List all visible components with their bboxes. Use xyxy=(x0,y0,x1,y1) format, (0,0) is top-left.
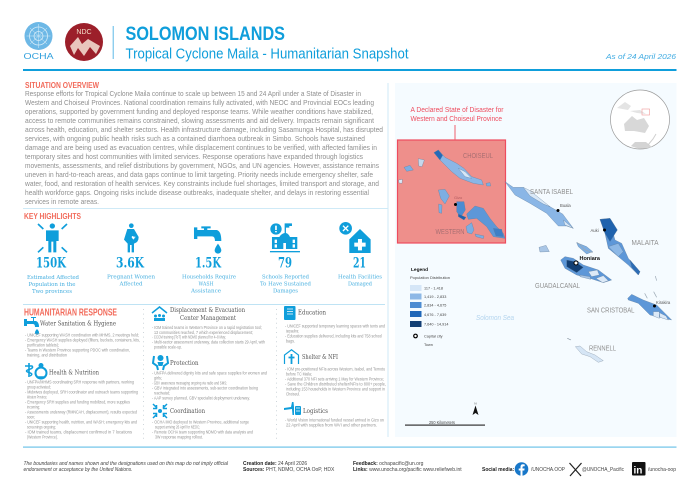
section: health and nutrition: - Assessments underway (RMNCAH, displacement), results expected xyxy=(25,410,137,414)
section: displacement and evacuation center management: possible scale-up. xyxy=(154,344,182,350)
highlight: health facilities: Health Facilities xyxy=(338,274,382,280)
highlight: pregnant women: Pregnant Women xyxy=(107,274,156,280)
section: coordination: Coordination xyxy=(170,408,205,415)
islands in west xyxy=(399,150,593,254)
highlight: schools damaged xyxy=(260,223,312,294)
section: coordination: - OCHA IMO deployed to Western Province, additional surge xyxy=(152,420,249,424)
section: health and nutrition: soon; xyxy=(27,414,35,420)
town markers xyxy=(454,195,671,308)
province labels xyxy=(436,151,658,352)
text block: overview paragraph: damage and are being used as evacuation centres, while displacement continues to be verified, with affected families in xyxy=(25,143,377,152)
section: displacement and evacuation center management: Center Management xyxy=(180,315,236,322)
section: displacement and evacuation center management: - CCCM training (ToT) with NDMO planned for 4–8 May; xyxy=(152,334,226,340)
text block: overview paragraph: across health, education, and shelter sectors. Health infrastructure damage, including Sasamunga Hospital, has disrupted xyxy=(25,125,383,134)
highlight: households WASH xyxy=(182,226,236,294)
scale bar xyxy=(405,420,485,426)
town markers: Auki xyxy=(590,228,599,233)
section: education: bags. xyxy=(286,338,295,344)
social media: Social media: xyxy=(482,467,515,473)
callout: state of disaster: Western and Choiseul Province xyxy=(410,116,502,123)
social media: @UNOCHA_Pacific xyxy=(582,467,624,473)
icon: person with rays xyxy=(38,223,67,252)
feedback and links xyxy=(353,461,462,473)
text block: overview paragraph: water, food, and restoration of health services. Key constraints include fuel shortages, limited transport and storage, and xyxy=(24,179,379,188)
highlight: affected population: Estimated Affected xyxy=(27,275,80,281)
section: shelter and nfi: - Additional 370 NFI sets arriving 1 May for Western Province; xyxy=(285,376,384,382)
legend: Legend xyxy=(411,267,428,273)
section: logistics: - World Vision International funded vessel arrived in Gizo on xyxy=(285,418,384,422)
section: health and nutrition: - IOM trained teams, displacement confirmed in 7 locations xyxy=(25,430,133,434)
icon: pregnant woman xyxy=(124,223,139,252)
icon: tap xyxy=(24,317,39,334)
section: shelter and nfi: including 153 households in Western Province and support in xyxy=(286,386,385,392)
panel: key highlights xyxy=(24,211,382,295)
panel: humanitarian response xyxy=(24,306,386,440)
social media xyxy=(482,462,676,476)
heading: humanitarian response: HUMANITARIAN RESPONSE xyxy=(24,308,117,318)
section: logistics xyxy=(284,402,384,428)
section: protection: Protection xyxy=(170,360,199,367)
icon: shelter with person xyxy=(284,350,298,364)
province labels: CHOISEUL xyxy=(463,151,493,160)
highlight: schools damaged: 79 xyxy=(278,256,292,272)
island: San Cristobal xyxy=(628,294,672,320)
section: health and nutrition: group activated; xyxy=(27,384,51,390)
section: education xyxy=(284,306,385,344)
section: health and nutrition: incoming; xyxy=(27,404,40,410)
icon: linkedin: in xyxy=(634,466,642,476)
highlight: schools damaged: Damages xyxy=(273,288,298,294)
island: Malaita xyxy=(600,218,640,275)
section: health and nutrition: - Midwives deployed, SRH coordinator and outreach teams supporting xyxy=(25,390,138,394)
icon: hands protecting person xyxy=(153,355,168,370)
legend: 2,834 - 4,675 xyxy=(424,304,446,308)
north arrow: N xyxy=(474,402,477,406)
text block: overview paragraph: movements, assessments, and relief distributions by government, NGOs, and UN agencies. However, assistance remains xyxy=(25,161,379,170)
section: logistics: Logistics xyxy=(303,408,328,415)
section: displacement and evacuation center management: Displacement & Evacuation xyxy=(170,307,245,314)
date: As of 24 April 2026 xyxy=(605,52,677,61)
section: health and nutrition: Western Province; xyxy=(27,394,47,400)
creation date and sources: Sources: PHT, NDMO, OCHA OoP, HDX xyxy=(243,467,335,473)
declared state of disaster box xyxy=(398,140,506,243)
section: coordination: support arriving 26 April for NEOC; xyxy=(155,424,200,430)
section: water sanitation and hygiene: purification tablets); xyxy=(27,342,59,348)
text block: overview paragraph: services, with ongoing public health risks such as a contained diarrhoea outbreak in Simbo. Schools have sustained xyxy=(25,134,365,143)
legend: 1,419 - 2,833 xyxy=(424,295,446,299)
section: health and nutrition: - UNICEF supporting health, nutrition, and WASH; emergency kits and xyxy=(25,420,137,424)
creation date and sources xyxy=(243,461,335,473)
Nggela islets xyxy=(577,243,593,254)
island: Western xyxy=(399,159,505,239)
icon: arrows to center xyxy=(153,404,167,418)
province labels: SAN CRISTOBAL xyxy=(587,306,634,314)
legend: 117 - 1,418 xyxy=(424,286,443,290)
province labels: SANTA ISABEL xyxy=(530,187,573,196)
section: water sanitation and hygiene: - Emergency WASH supplies deployed (filters, buckets, containers, kits, xyxy=(25,338,140,342)
callout: state of disaster: A Declared State of Disaster for xyxy=(410,107,504,114)
highlight: households WASH: WASH xyxy=(198,282,214,288)
section: protection: reactivated; xyxy=(154,390,170,396)
section: coordination: 3W response mapping rollout. xyxy=(155,434,203,440)
section: protection: - GBV integrated into assessments, sub-sector coordination being xyxy=(152,386,258,390)
island: Santa Isabel xyxy=(505,182,573,228)
legend: 7,640 - 14,914 xyxy=(424,322,448,326)
section: protection: - GBV awareness messaging ongoing via radio and SMS; xyxy=(152,380,227,386)
section: shelter and nfi: Shelter & NFI xyxy=(302,354,338,361)
text block: overview paragraph: uneven in hard-to-reach areas, and data gaps continue to limit targeting. Priority needs include emergency shelter, safe xyxy=(25,170,373,179)
town markers: Buala xyxy=(560,203,571,208)
section: coordination xyxy=(152,404,253,440)
icon: X xyxy=(570,463,582,476)
highlight: pregnant women xyxy=(107,223,156,288)
section: water sanitation and hygiene xyxy=(24,317,140,358)
north arrow xyxy=(472,402,478,415)
creation date and sources: Creation date: 24 April 2026 xyxy=(243,461,307,467)
disclaimer xyxy=(24,461,229,473)
highlight: affected population: Population in the xyxy=(28,282,76,288)
icon: facebook xyxy=(515,462,528,476)
title: SOLOMON ISLANDS xyxy=(126,24,285,45)
highlight: health facilities: 21 xyxy=(353,256,366,272)
small cay marks xyxy=(577,242,657,298)
icon: health facility with cross xyxy=(339,222,371,253)
highlight: households WASH: 1.5K xyxy=(195,256,222,272)
section: shelter and nfi: - IOM pre-positioned NFIs across Western, Isabel, and Temotu xyxy=(285,366,385,372)
section: education: - Education supplies delivered, including kits and 758 school xyxy=(285,334,382,338)
section: protection: girls; xyxy=(154,376,162,380)
highlight: households WASH: Assistance xyxy=(190,288,221,294)
section: shelter and nfi xyxy=(284,350,386,396)
section: protection xyxy=(152,355,267,400)
highlight: affected population: 150K xyxy=(36,256,67,272)
town markers: Kirakira xyxy=(656,300,671,305)
province labels: WESTERN xyxy=(436,227,464,236)
highlight: affected population: Two provinces xyxy=(32,289,72,295)
section: education: Education xyxy=(298,310,326,316)
section: health and nutrition: Health & Nutrition xyxy=(49,370,99,376)
section: displacement and evacuation center management: - IOM trained teams in Western Province on a rapid registration tool; xyxy=(152,325,262,330)
legend: Population Distribution xyxy=(410,276,450,280)
islands in east xyxy=(561,218,672,320)
legend: 4,676 - 7,639 xyxy=(424,313,446,317)
logo: NDC xyxy=(65,23,103,61)
text block: overview paragraph: health workforce gaps. Ongoing risks include disease outbreaks, inadequate shelter, and delays in restoring essential xyxy=(25,188,369,197)
icon: book xyxy=(284,306,296,320)
panel: situation overview xyxy=(24,80,383,206)
subtitle: Tropical Cyclone Maila - Humanitarian Snapshot xyxy=(126,46,408,62)
feedback and links: Feedback: ochapacific@un.org xyxy=(353,461,424,467)
town markers: Gizo xyxy=(454,195,463,200)
highlight: pregnant women: Affected xyxy=(118,282,143,288)
section: shelter and nfi: before TC Maila; xyxy=(286,372,312,376)
section: water sanitation and hygiene: training, and distribution xyxy=(27,352,67,358)
text block: overview paragraph: Response efforts for Tropical Cyclone Maila continue to scale up between 15 and 24 April under a State of Disaster in xyxy=(25,89,361,98)
social media: /UNOCHA.OOP xyxy=(531,467,566,473)
heading: key highlights: KEY HIGHLIGHTS xyxy=(24,211,81,221)
section: water sanitation and hygiene: Water Sanitation & Hygiene xyxy=(40,320,116,328)
section: displacement and evacuation center management xyxy=(152,307,265,350)
icon: plane and truck xyxy=(284,402,301,415)
icon: school with alert xyxy=(270,223,300,252)
section: shelter and nfi: - Save the Children distributed shelter/NFIs to 800+ people, xyxy=(285,382,386,386)
callout: state of disaster xyxy=(410,107,504,123)
highlight: health facilities: Damaged xyxy=(348,282,373,288)
scale bar: 250 Kilometers xyxy=(429,420,455,425)
section: shelter and nfi: Choiseul. xyxy=(286,392,300,396)
province labels: MALAITA xyxy=(632,238,658,247)
logo: NDC: NDC xyxy=(76,29,92,36)
town markers: Honiara xyxy=(580,256,601,262)
icon: people under shelter xyxy=(152,307,167,321)
section: health and nutrition: - Emergency SRH supplies and funding mobilized, more supplies xyxy=(25,400,131,404)
section: protection: - UNFPA delivered dignity kits and safe space supplies for women and xyxy=(152,370,267,376)
icon: water tap xyxy=(194,226,221,254)
highlight: households WASH: Households Require xyxy=(182,274,236,280)
logo: UN OCHA: OCHA xyxy=(24,51,54,61)
header xyxy=(23,22,677,71)
section: education: - UNICEF supported temporary learning spaces with tents and xyxy=(285,324,385,328)
disclaimer: The boundaries and names shown and the designations used on this map do not imply official xyxy=(24,461,229,467)
province labels: Solomon Sea xyxy=(476,313,514,322)
highlight: affected population xyxy=(27,223,80,295)
legend: Capital city xyxy=(424,334,443,338)
section: water sanitation and hygiene: - Teams in Western Province supporting PDOC with coordination, xyxy=(25,348,130,352)
text block: overview paragraph: access to remote communities remains constrained, slowing assessments and aid delivery. Impacts remain significant xyxy=(25,116,375,125)
text block: overview paragraph: temporary sites and host communities with limited services. Response operations have expanded through logistics xyxy=(25,152,363,161)
island: Choiseul xyxy=(434,150,491,186)
icon: linkedin xyxy=(632,462,646,476)
section: health and nutrition: (Western Province). xyxy=(27,434,58,440)
section: protection: - AAP survey planned, GBV specialist deployment underway. xyxy=(152,396,250,400)
island: Russell xyxy=(539,245,549,252)
highlight: schools damaged: Schools Reported xyxy=(262,274,310,280)
text block: overview paragraph: Western and Choiseul Provinces. National coordination remains fully activated, with NEOC and Provincial EOCs leading xyxy=(25,98,374,107)
text block: overview paragraph xyxy=(24,89,383,206)
text block: overview paragraph: services in remote areas. xyxy=(25,197,99,206)
feedback and links: Links: www.unocha.org/pacific www.reliefweb.int xyxy=(353,467,462,473)
section: education: tarpaulins; xyxy=(286,328,299,334)
footer xyxy=(24,461,676,476)
heading: situation overview: SITUATION OVERVIEW xyxy=(25,80,100,90)
section: logistics: 22 April with supplies from WVI and other partners. xyxy=(286,422,377,428)
section: coordination: - Remote OCHA team supporting NDMO with data analysis and xyxy=(152,430,253,434)
legend: Town xyxy=(424,343,433,347)
highlight: health facilities xyxy=(338,222,382,288)
province labels: GUADALCANAL xyxy=(535,281,580,290)
text block: overview paragraph: operations, supported by government funding and deployed response teams. While weather conditions have stabilized, xyxy=(25,107,373,116)
logo: UN OCHA xyxy=(24,22,54,61)
highlight: pregnant women: 3.6K xyxy=(116,256,145,272)
social media: /unocha-oop xyxy=(648,467,676,473)
inset globe xyxy=(610,90,670,149)
legend xyxy=(410,267,450,347)
section: health and nutrition: - UNFPA/MHMS coordinating SRH response with partners, working xyxy=(25,380,134,384)
island: Rennell xyxy=(567,338,603,362)
section: displacement and evacuation center management: - Multi-sector assessment underway, data collection starts 29 April, with xyxy=(152,340,265,344)
icon: health and nutrition xyxy=(25,363,46,378)
section: water sanitation and hygiene: - UNICEF supporting WASH coordination with MHMS, 2 meetings held; xyxy=(25,332,139,338)
section: health and nutrition: screenings ongoing; xyxy=(27,424,56,430)
highlight: schools damaged: To Have Sustained xyxy=(260,282,312,288)
section: health and nutrition xyxy=(25,363,138,440)
panel: map xyxy=(395,83,676,437)
section: displacement and evacuation center management: 13 communities reached, 7 which experienced displacement; xyxy=(154,330,253,335)
province labels: RENNELL xyxy=(589,344,616,352)
island: Guadalcanal xyxy=(561,257,612,283)
disclaimer: endorsement or acceptance by the United Nations. xyxy=(24,467,132,473)
